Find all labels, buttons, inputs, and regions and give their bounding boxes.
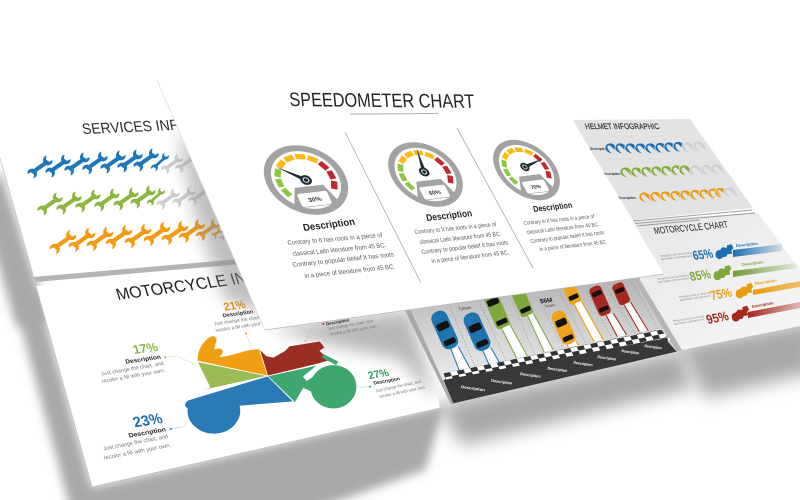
label 17%: Description [125,355,162,366]
label top right [325,317,378,337]
label 23%: recolor a fill with your own. [103,443,173,462]
pie labels [100,299,427,462]
description column 1: classical Latin literature from 45 BC. [292,242,387,258]
label 27%: 27% [366,367,391,382]
car: red 1 [588,284,612,317]
bar red 95% [673,300,800,327]
wrench row: green [35,183,214,217]
panel: helmet infographic slide [572,119,755,226]
car: green 2 [510,287,534,318]
description column 3: in a piece of literature from 45 BC. [539,240,608,253]
motorcycle slide title: MOTORCYCLE INFOGRAPHIC [113,256,342,304]
description column 1: Contrary to popular belief It has roots [292,251,396,269]
bar red 95%: Shopping and purchasing [673,314,705,323]
car: blue 1 [429,308,460,352]
label 21%: recolor a fill with your own. [215,319,273,334]
column divider 1 [345,132,421,283]
label 17% [100,339,166,385]
dark base strip [443,338,677,403]
bar green 85%: agriculture entertainment [658,276,689,284]
gauge 70% [481,136,572,204]
services bottom edge [33,259,242,282]
label top right: recolor a fill with your own. [329,323,378,337]
bar orange 75%: 75% [708,285,734,303]
wrench row: blue [25,147,200,180]
label 23%: Just change the chart, and [103,434,169,452]
left edge highlight [157,80,265,330]
gauge 60%: 60% [428,190,443,197]
label 17%: Just change the chart, and [100,361,165,378]
main panel shadow on motorcycle slide [270,310,436,400]
bar orange 75% [679,278,800,303]
strip labels: Description [597,355,617,362]
bar red 95%: Description [751,300,774,309]
helmet labels: Description [590,147,608,151]
bottom edge highlight [265,274,664,330]
gauge 30% [251,141,361,219]
gauge 70%: 70% [530,184,543,191]
bar orange 75%: Shopping and purchasing [679,291,711,299]
main title: SPEEDOMETER CHART [288,89,476,113]
helmet labels: Description [618,196,636,200]
drop shadows under slides [0,170,800,500]
label 23%: 23% [131,410,165,431]
panel: race cars slide [405,276,683,404]
bar red 95%: agriculture entertainment [674,317,705,326]
description column 2: in a piece of literature from 45 BC. [431,249,510,265]
label 17%: 17% [131,339,160,357]
description column 3: Description [532,200,573,214]
panel: motorcycle infographic slide [36,256,440,487]
description column 2: Description [425,208,474,224]
helmet row blue [605,141,707,154]
label top right: Just change the chart, and [327,318,374,331]
lane lines [451,302,648,371]
car: red 2 [611,281,631,306]
panel: services infographic slide [0,110,260,282]
strip labels: Description [461,385,486,392]
description column 1: Contrary to It has roots in a piece of [287,232,383,247]
gauge 30%: 30% [307,196,323,204]
bar green 85% [657,259,797,284]
panel: motorcycle chart slide [633,213,800,350]
bar blue 65% [660,241,782,263]
label 27%: recolor a fill with your own. [378,384,427,399]
description column 2 [414,208,510,265]
lane dashes [450,283,658,367]
bar blue 65%: agriculture entertainment [661,254,692,261]
value label 6M [539,297,556,308]
description column 2: Contrary to popular belief It has roots [421,239,509,256]
motorcycle panel edges [36,286,440,487]
motorcycle pie chart [185,336,357,434]
description column 1: in a piece of literature from 45 BC. [304,264,396,280]
services left edge [0,158,34,278]
bar orange 75%: Description [754,278,777,286]
gauge 60% [376,138,476,210]
column divider 2 [457,128,533,268]
description column 3: Contrary to It has roots in a piece of [523,214,595,227]
helmet labels [590,147,636,200]
description column 1 [287,217,396,280]
car: green 1 [483,292,511,330]
description column 2: Contrary to It has roots in a piece of [414,221,497,236]
helmet row green [620,164,725,178]
description column 3 [523,200,608,253]
chart title: MOTORCYCLE CHART [653,220,730,237]
label 27%: Just change the chart, and [374,379,423,393]
label 23%: Description [128,426,167,440]
bar green 85%: Description [742,259,765,267]
description column 2: classical Latin literature from 45 BC. [419,231,502,246]
bar blue 65%: Shopping and purchasing [660,251,692,258]
car: orange small [563,284,582,305]
bar orange 75%: agriculture entertainment [680,294,711,302]
label 27%: Description [373,376,401,387]
title underline [350,112,438,115]
label 21% [213,299,273,334]
wrench row: orange [47,217,234,256]
lane stripes [451,302,648,371]
finish line checker band [443,329,671,383]
strip labels: Description [520,372,542,379]
label 21%: Description [222,309,254,319]
bar green 85%: 85% [688,266,713,284]
label 21%: 21% [222,299,247,314]
bar green 85%: Shopping and purchasing [657,273,689,281]
helmet row orange [639,187,738,203]
helmet labels: Description [603,172,621,176]
bar blue 65%: 65% [691,246,715,263]
main panel shadow on services slide [178,135,290,320]
services title: SERVICES INFOGRAPHIC [81,114,254,138]
description column 1: Description [302,217,356,234]
label 17%: recolor a fill with your own. [101,368,166,385]
panel: speedometer chart slide [157,45,664,330]
bar blue 65%: Description [736,241,759,248]
label 27% [366,367,427,399]
value label 6M: $6M [539,297,553,305]
strip labels [461,344,662,392]
label 21%: Just change the chart, and [213,314,271,327]
car: orange large [550,309,577,347]
car: blue 2 [461,310,493,353]
strip labels: Description [491,379,513,386]
helmet title: HELMET INFOGRAPHIC [584,122,661,131]
stripes between helmet and chart slides [633,210,755,226]
description column 3: Contrary to popular belief It has roots [530,230,605,245]
strip labels: Description [547,366,568,373]
strip labels: Description [573,361,593,367]
value label 6M: 7years [544,303,556,308]
strip labels: Description [621,349,640,356]
connector lines and dots [164,323,371,430]
value label years: 7years [457,305,473,311]
description column 3: classical Latin literature from 45 BC. [526,222,600,236]
bar red 95%: 95% [704,308,731,327]
label 23% [103,410,173,462]
label top right: Description [325,317,350,326]
strip labels: Description [644,344,662,350]
